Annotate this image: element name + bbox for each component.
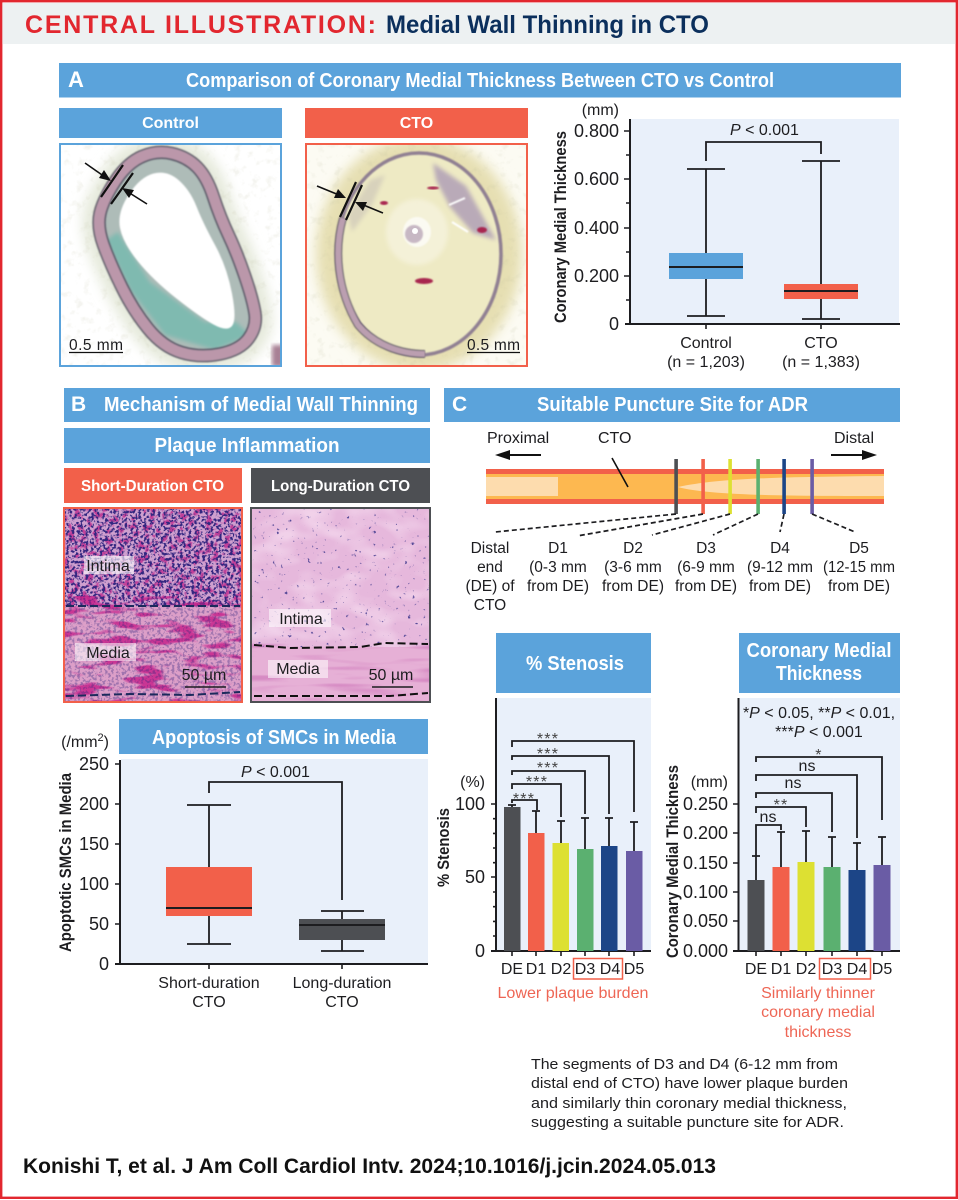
bar chart: % stenosis: D4 — [600, 961, 620, 978]
bar chart: % stenosis: 100 — [455, 794, 485, 814]
bar chart: coronary medial thickness: 0.200 — [683, 823, 728, 843]
bar chart: % stenosis: 50 — [465, 867, 485, 887]
plaque inflammation heading — [64, 428, 430, 463]
bar chart: % stenosis: *** — [526, 774, 548, 791]
apoptosis heading: Apoptosis of SMCs in Media — [152, 727, 397, 749]
arrows — [317, 186, 383, 213]
box plot: apoptotic SMCs: 200 — [79, 794, 109, 814]
bar chart: % stenosis: D3 — [575, 961, 595, 978]
bar chart: % stenosis: 0 — [475, 941, 485, 961]
bar chart: coronary medial thickness: ***P < 0.001 — [775, 724, 863, 741]
box plot: coronary medial thickness: (n = 1,383) — [782, 354, 860, 371]
bar chart: % stenosis: D1 — [526, 961, 546, 978]
box plot: coronary medial thickness: Control — [680, 335, 732, 352]
box plot: apoptotic SMCs: Long-duration — [293, 975, 391, 992]
histology: long-duration CTO: Media — [276, 661, 320, 678]
proximal arrow: Proximal — [487, 430, 549, 447]
apoptosis heading — [119, 719, 428, 754]
arrows — [85, 163, 147, 204]
segment descriptions: from DE) — [828, 578, 890, 595]
bar chart: coronary medial thickness: 0.150 — [683, 853, 728, 873]
measurement lines — [101, 165, 133, 204]
CTO label — [305, 108, 528, 138]
histology: control artery: 0.5 mm — [69, 337, 123, 354]
box plot: apoptotic SMCs: P < 0.001 — [241, 764, 310, 781]
bar chart: coronary medial thickness: 0.100 — [683, 882, 728, 902]
panel A heading: A — [68, 67, 84, 92]
panel A heading: Comparison of Coronary Medial Thickness Between CTO vs Control — [186, 70, 774, 92]
bar chart: coronary medial thickness: *P < 0.05, **P < 0.01, — [743, 705, 895, 722]
segment markers — [674, 459, 814, 514]
bar chart: coronary medial thickness: DE — [745, 961, 767, 978]
control label — [59, 108, 282, 138]
bar chart: % stenosis: *** — [537, 746, 559, 763]
histology: CTO artery — [306, 137, 527, 371]
bar chart: coronary medial thickness: 0.050 — [683, 911, 728, 931]
box plot: apoptotic SMCs: 0 — [99, 954, 109, 974]
% stenosis heading: % Stenosis — [526, 653, 624, 675]
segment descriptions: (3-6 mm — [604, 559, 662, 576]
coronary medial thickness heading: Thickness — [776, 663, 862, 685]
histology: short-duration CTO: Intima — [86, 558, 130, 575]
segment descriptions: end — [477, 559, 503, 576]
segment descriptions: D2 — [623, 540, 643, 557]
bar chart: % stenosis — [434, 698, 651, 1002]
bar chart: coronary medial thickness: * — [815, 747, 823, 764]
bar chart: coronary medial thickness: Coronary Medial Thickness — [663, 765, 682, 958]
conclusion text: suggesting a suitable puncture site for ADR. — [531, 1114, 844, 1131]
bar chart: coronary medial thickness: coronary medial — [761, 1004, 875, 1021]
panel C: suitable puncture site — [434, 388, 900, 1131]
bar chart: coronary medial thickness: D1 — [771, 961, 791, 978]
bar chart: % stenosis: (%) — [460, 774, 485, 791]
segment descriptions: CTO — [474, 597, 506, 614]
CTO label: CTO — [598, 430, 631, 447]
box plot: coronary medial thickness: P < 0.001 — [730, 122, 799, 139]
box plot: apoptotic SMCs: 250 — [79, 754, 109, 774]
box plot: coronary medial thickness — [551, 102, 900, 371]
bar chart: % stenosis: *** — [537, 760, 559, 777]
vessel schematic — [486, 458, 884, 536]
bar chart: % stenosis: D2 — [551, 961, 571, 978]
title band — [2, 3, 956, 44]
box plot: coronary medial thickness: 0.400 — [574, 218, 619, 238]
box plot: apoptotic SMCs: CTO — [325, 994, 359, 1011]
bar chart: % stenosis: % Stenosis — [434, 808, 453, 887]
histology: short-duration CTO — [64, 508, 242, 702]
panel A: comparison of medial thickness — [59, 63, 901, 371]
coronary medial thickness heading: Coronary Medial — [746, 640, 892, 662]
box plot: coronary medial thickness: (n = 1,203) — [667, 354, 745, 371]
box plot: coronary medial thickness: (mm) — [582, 102, 619, 119]
bar chart: coronary medial thickness: 0.000 — [683, 941, 728, 961]
bar chart: coronary medial thickness: (mm) — [691, 774, 728, 791]
histology: long-duration CTO — [251, 508, 430, 702]
bar chart: coronary medial thickness: D5 — [872, 961, 892, 978]
segment descriptions — [465, 540, 895, 614]
bar chart: coronary medial thickness: D4 — [847, 961, 867, 978]
bar chart: coronary medial thickness: D2 — [796, 961, 816, 978]
box plot: apoptotic SMCs: CTO — [192, 994, 226, 1011]
segment descriptions: (6-9 mm — [677, 559, 735, 576]
bar chart: % stenosis: D5 — [624, 961, 644, 978]
long-duration label: Long-Duration CTO — [271, 478, 410, 495]
segment descriptions: (12-15 mm — [823, 559, 895, 576]
panel B heading — [64, 388, 430, 422]
short-duration label — [64, 468, 242, 503]
segment descriptions: D5 — [849, 540, 869, 557]
citation: Konishi T, et al. J Am Coll Cardiol Intv. 2024;10.1016/j.jcin.2024.05.013 — [23, 1155, 716, 1178]
distal arrow — [831, 430, 877, 460]
histology: long-duration CTO: Intima — [279, 611, 323, 628]
segment descriptions: (9-12 mm — [747, 559, 813, 576]
title band: CENTRAL ILLUSTRATION: — [25, 11, 376, 39]
panel C heading: Suitable Puncture Site for ADR — [537, 394, 809, 416]
box plot: apoptotic SMCs: 2 — [98, 732, 104, 744]
title band: Medial Wall Thinning in CTO — [386, 11, 709, 39]
box plot: apoptotic SMCs — [56, 732, 428, 1011]
bar chart: coronary medial thickness: 0.250 — [683, 794, 728, 814]
bar chart: coronary medial thickness — [663, 698, 900, 1041]
segment descriptions: D1 — [548, 540, 568, 557]
conclusion text: and similarly thin coronary medial thickness, — [531, 1095, 847, 1112]
histology: short-duration CTO: 50 µm — [182, 667, 226, 684]
bar chart: coronary medial thickness: ns — [760, 809, 776, 826]
box plot: coronary medial thickness: 0 — [609, 314, 619, 334]
segment descriptions: D3 — [696, 540, 716, 557]
panel C heading — [444, 388, 900, 422]
bar chart: % stenosis: DE — [501, 961, 523, 978]
bar chart: % stenosis: *** — [537, 731, 559, 748]
segment descriptions: from DE) — [749, 578, 811, 595]
segment descriptions: (DE) of — [465, 578, 515, 595]
coronary medial thickness heading — [739, 633, 900, 693]
box plot: coronary medial thickness: Coronary Medial Thickness — [551, 131, 570, 323]
segment descriptions: Distal — [471, 540, 509, 557]
measurement lines — [340, 182, 362, 220]
histology: long-duration CTO: 50 µm — [369, 667, 413, 684]
segment descriptions: (0-3 mm — [529, 559, 587, 576]
box plot: apoptotic SMCs: ) — [104, 734, 109, 751]
segment descriptions: from DE) — [675, 578, 737, 595]
box plot: coronary medial thickness: 0.200 — [574, 266, 619, 286]
% stenosis heading — [496, 633, 651, 693]
control label: Control — [142, 115, 199, 132]
CTO label: CTO — [400, 115, 433, 132]
bar chart: % stenosis: Lower plaque burden — [498, 985, 648, 1002]
plaque inflammation heading: Plaque Inflammation — [154, 435, 340, 457]
box plot: coronary medial thickness: CTO — [804, 335, 838, 352]
box plot: coronary medial thickness: 0.800 — [574, 121, 619, 141]
bar chart: coronary medial thickness: ns — [785, 775, 801, 792]
long-duration label — [251, 468, 430, 503]
conclusion text: distal end of CTO) have lower plaque burden — [531, 1075, 848, 1092]
histology: control artery — [60, 144, 284, 367]
box plot: coronary medial thickness: 0.600 — [574, 169, 619, 189]
panel B heading: Mechanism of Medial Wall Thinning — [104, 394, 418, 416]
bar chart: coronary medial thickness: D3 — [822, 961, 842, 978]
conclusion text — [531, 1056, 848, 1131]
bar chart: coronary medial thickness: thickness — [785, 1024, 851, 1041]
panel B heading: B — [71, 393, 86, 416]
box plot: apoptotic SMCs: 100 — [79, 874, 109, 894]
segment descriptions: from DE) — [527, 578, 589, 595]
box plot: apoptotic SMCs: (/mm — [61, 734, 98, 751]
segment descriptions: D4 — [770, 540, 790, 557]
panel A heading — [59, 63, 901, 98]
proximal arrow — [487, 430, 549, 460]
panel B: mechanism of medial wall thinning — [56, 388, 430, 1011]
bar chart: coronary medial thickness: ** — [774, 797, 788, 814]
histology: CTO artery: 0.5 mm — [467, 337, 520, 354]
segment descriptions: from DE) — [602, 578, 664, 595]
box plot: apoptotic SMCs: 50 — [89, 914, 109, 934]
panel C heading: C — [452, 393, 467, 416]
bar chart: % stenosis: *** — [513, 791, 535, 808]
box plot: apoptotic SMCs: Short-duration — [158, 975, 260, 992]
conclusion text: The segments of D3 and D4 (6-12 mm from — [531, 1056, 838, 1073]
short-duration label: Short-Duration CTO — [81, 478, 224, 495]
distal arrow: Distal — [834, 430, 874, 447]
box plot: apoptotic SMCs: Apoptotic SMCs in Media — [56, 773, 75, 952]
bar chart: coronary medial thickness: Similarly thinner — [761, 985, 876, 1002]
bar chart: coronary medial thickness: ns — [799, 758, 815, 775]
box plot: apoptotic SMCs: 150 — [79, 834, 109, 854]
histology: short-duration CTO: Media — [86, 645, 130, 662]
